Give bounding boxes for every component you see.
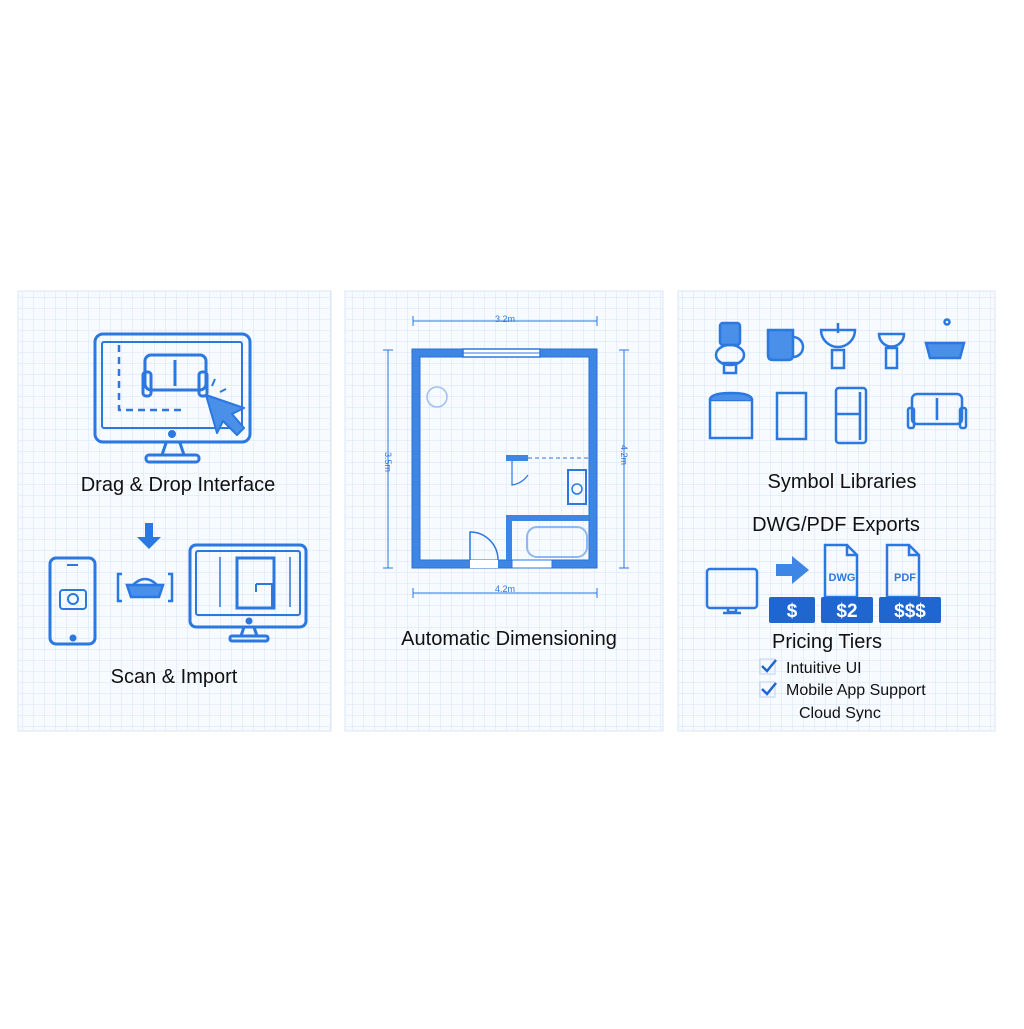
icon: scanned tub [118, 574, 172, 601]
panel: symbols / exports / pricing [678, 291, 995, 731]
feature checklist [760, 659, 926, 722]
dimension lines: 3.2m [495, 314, 515, 324]
heading: Symbol Libraries: Symbol Libraries [768, 471, 916, 493]
icon: phone with camera [50, 558, 95, 644]
dimension lines: 3.5m [383, 452, 393, 472]
heading: DWG/PDF Exports: DWG/PDF Exports [752, 514, 920, 536]
heading: Automatic Dimensioning: Automatic Dimensioning [401, 628, 617, 650]
icon: export monitor, arrow, files: PDF [894, 572, 916, 584]
icon: export monitor, arrow, files [707, 545, 919, 613]
icon: monitor with sofa and cursor [95, 334, 250, 462]
heading: Scan & Import: Scan & Import [111, 666, 238, 688]
floor plan [412, 349, 597, 568]
pricing tiers badges: $2 [836, 601, 858, 622]
pricing tiers badges: $$$ [894, 601, 926, 622]
feature checklist: Cloud Sync [799, 705, 881, 722]
feature checklist: Mobile App Support [786, 682, 926, 699]
pricing tiers badges: $ [787, 601, 798, 622]
icon: export monitor, arrow, files: DWG [829, 572, 855, 584]
feature checklist: Intuitive UI [786, 660, 862, 677]
dimension lines [383, 314, 629, 598]
arrow: down [137, 523, 161, 549]
icon: monitor with plan [190, 545, 306, 641]
heading: Drag & Drop Interface: Drag & Drop Interface [81, 474, 275, 496]
panel: automatic dimensioning [345, 291, 663, 731]
panel: drag & drop / scan [18, 291, 331, 731]
heading: Pricing Tiers: Pricing Tiers [772, 631, 882, 653]
dimension lines: 4.2m [495, 584, 515, 594]
dimension lines: 4.2m [619, 445, 629, 465]
icons: symbol library [710, 320, 966, 443]
pricing tiers badges [769, 597, 941, 623]
